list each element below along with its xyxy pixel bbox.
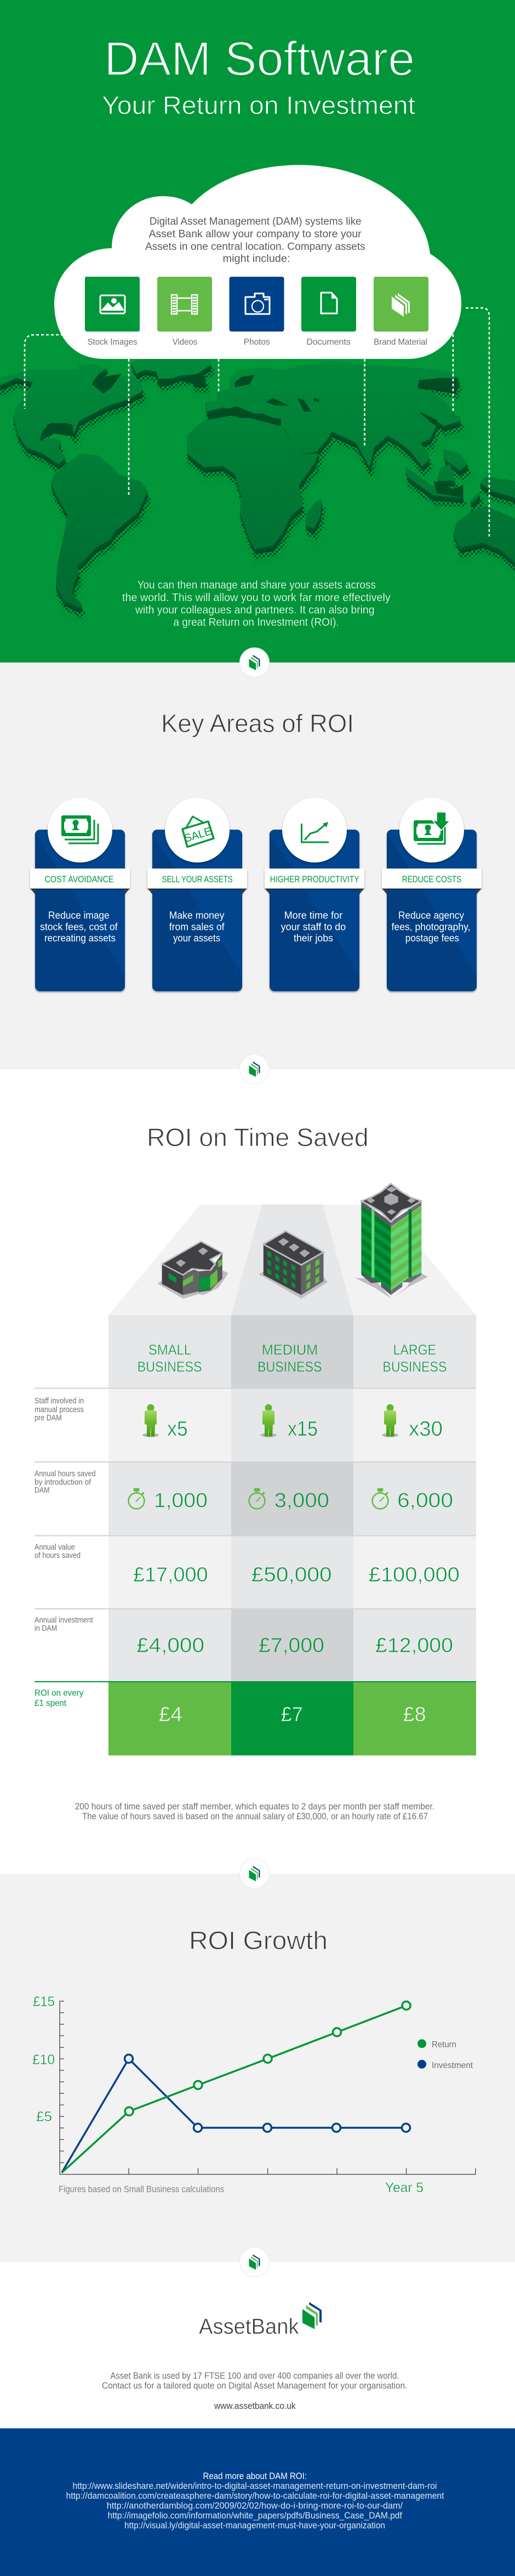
panel: cost avoidance card: recreating assets — [44, 932, 116, 944]
panel: cost avoidance card: stock fees, cost of — [40, 921, 118, 933]
table row: annual hours saved: 3,000 — [274, 1489, 329, 1511]
icon: photos tile — [229, 277, 284, 332]
table row: staff involved — [35, 1388, 476, 1462]
table row: annual hours saved: DAM — [35, 1486, 49, 1495]
icon: medium building — [259, 1231, 328, 1299]
table: business size columns: BUSINESS — [138, 1358, 202, 1375]
footnote — [75, 1801, 434, 1821]
axis labels: £15 — [33, 1994, 55, 2009]
heading: ROI growth: ROI Growth — [189, 1926, 328, 1955]
chart axes — [60, 2001, 476, 2174]
table row: ROI on every pound spent: ROI on every — [35, 1689, 83, 1698]
table row: annual investment — [35, 1609, 476, 1682]
tile labels: Documents — [306, 338, 351, 347]
further reading: http://visual.ly/digital-asset-management-must-have-your-organization — [124, 2521, 385, 2531]
table row: ROI on every pound spent: £8 — [403, 1703, 426, 1726]
intro paragraph below the map — [122, 579, 391, 629]
panel: higher productivity card: your staff to do — [281, 921, 346, 933]
panel: blue footer — [0, 2429, 515, 2576]
table row: annual investment: £12,000 — [375, 1634, 453, 1657]
panel: green hero background — [0, 0, 515, 662]
table row: ROI on every pound spent: £4 — [159, 1703, 182, 1726]
axis labels: £5 — [36, 2109, 52, 2124]
panel: higher productivity card — [265, 798, 364, 991]
table row: staff involved: x30 — [409, 1418, 443, 1441]
section badge — [240, 648, 270, 677]
chart legend — [417, 2040, 473, 2070]
table: perspective top — [108, 1204, 476, 1315]
table row: staff involved: x5 — [167, 1418, 188, 1441]
icon: sale sign: SALE — [183, 825, 213, 845]
icon: sale sign — [182, 816, 214, 847]
icon: small building — [158, 1242, 228, 1299]
table: business size columns: BUSINESS — [258, 1358, 322, 1375]
website: www.assetbank.co.uk — [214, 2401, 296, 2411]
table row: ROI on every pound spent — [35, 1682, 476, 1756]
panel: higher productivity card: More time for — [284, 910, 342, 921]
section badge — [240, 2247, 270, 2277]
further reading — [66, 2471, 444, 2531]
panel: reduce costs card: REDUCE COSTS — [402, 874, 461, 884]
further reading: http://www.slideshare.net/widen/intro-to-digital-asset-management-return-on-investment-dam-roi — [72, 2481, 437, 2491]
table row: annual investment: in DAM — [35, 1624, 57, 1633]
table: business size columns: LARGE — [393, 1341, 436, 1358]
cloud text: Assets in one central location. Company assets — [145, 241, 365, 253]
section badge — [240, 1859, 270, 1888]
icon: brand material tile — [374, 277, 428, 332]
cloud text: might include: — [222, 253, 290, 265]
table: business size columns: SMALL — [148, 1341, 191, 1358]
world map — [0, 359, 515, 621]
panel: reduce costs card — [382, 798, 482, 991]
table row: ROI on every pound spent: £1 spent — [35, 1699, 67, 1708]
footnote: 200 hours of time saved per staff member, which equates to 2 days per month per staff member. — [75, 1801, 434, 1812]
logo: Asset Bank — [199, 2302, 322, 2339]
heading: key areas of ROI: Key Areas of ROI — [161, 709, 354, 738]
table row: staff involved: x15 — [288, 1418, 318, 1441]
subtitle: Your Return on Investment — [102, 91, 415, 119]
panel: higher productivity card: their jobs — [294, 932, 333, 944]
icon: large building — [356, 1184, 428, 1299]
panel: sell your assets card: Make money — [169, 910, 225, 921]
table row: annual value of hours saved: £50,000 — [251, 1563, 332, 1586]
chart legend: Investment — [432, 2061, 473, 2070]
company text — [102, 2371, 407, 2391]
panel: cost avoidance card — [30, 798, 130, 991]
panel: higher productivity card: HIGHER PRODUCTIVITY — [270, 874, 359, 884]
icon: stock images tile — [85, 277, 140, 332]
tile labels: Brand Material — [374, 338, 427, 347]
icon: money stack — [61, 815, 98, 843]
company text: Contact us for a tailored quote on Digital Asset Management for your organisation. — [102, 2380, 407, 2391]
line chart — [32, 1994, 476, 2195]
table row: annual hours saved: by introduction of — [35, 1478, 91, 1487]
cloud text — [145, 216, 365, 265]
panel: cost avoidance card: Reduce image — [48, 910, 110, 921]
title: DAM Software — [104, 32, 415, 85]
axis labels: Year 5 — [385, 2180, 424, 2195]
intro paragraph below the map: You can then manage and share your assets across — [138, 579, 376, 591]
panel: cloud — [54, 165, 461, 359]
table row: annual value of hours saved: £17,000 — [133, 1563, 208, 1586]
table row: annual investment: Annual investment — [35, 1616, 93, 1625]
heading: ROI on time saved: ROI on Time Saved — [147, 1123, 369, 1152]
panel: sell your assets card — [147, 798, 247, 991]
table: business size columns: MEDIUM — [262, 1341, 318, 1358]
tile labels: Photos — [244, 338, 270, 347]
intro paragraph below the map: with your colleagues and partners. It can also bring — [135, 604, 375, 616]
table row: annual value of hours saved: £100,000 — [369, 1563, 460, 1586]
table row: annual investment: £7,000 — [259, 1634, 324, 1657]
panel: ROI on time saved background — [0, 1069, 515, 1874]
panel: reduce costs card: postage fees — [405, 932, 459, 944]
table row: annual hours saved: 6,000 — [397, 1489, 453, 1511]
table row: annual investment: £4,000 — [136, 1634, 204, 1657]
further reading: Read more about DAM ROI: — [203, 2471, 307, 2481]
panel: reduce costs card: Reduce agency — [398, 910, 465, 921]
icon: documents tile — [301, 277, 356, 332]
icon: money with down arrow — [414, 812, 450, 844]
table row: staff involved: manual process — [35, 1406, 84, 1414]
table row: ROI on every pound spent: £7 — [281, 1703, 303, 1726]
table: business size columns: BUSINESS — [382, 1358, 447, 1375]
intro paragraph below the map: the world. This will allow you to work far more effectively — [122, 592, 391, 604]
axis labels: £10 — [32, 2052, 55, 2067]
table row: annual value of hours saved: Annual value — [35, 1543, 75, 1552]
intro paragraph below the map: a great Return on Investment (ROI). — [173, 616, 339, 629]
company text: Asset Bank is used by 17 FTSE 100 and over 400 companies all over the world. — [110, 2371, 399, 2381]
icon: growth chart — [301, 822, 329, 842]
tile labels — [88, 338, 427, 347]
panel: key areas background — [0, 662, 515, 1069]
section badge — [240, 1054, 270, 1084]
table row: annual value of hours saved: of hours saved — [35, 1551, 81, 1560]
series: return — [62, 2001, 410, 2173]
logo: Asset Bank: AssetBank — [199, 2315, 300, 2339]
table row: annual hours saved — [35, 1462, 476, 1535]
panel: sell your assets card: your assets — [173, 932, 220, 944]
footnote: The value of hours saved is based on the annual salary of £30,000, or an hourly rate of £16.67 — [82, 1811, 428, 1821]
table row: annual hours saved: Annual hours saved — [35, 1470, 95, 1478]
panel: reduce costs card: fees, photography, — [392, 921, 470, 933]
tile labels: Stock Images — [88, 338, 137, 347]
panel: ROI growth background — [0, 1874, 515, 2262]
chart note: Figures based on Small Business calculations — [59, 2184, 224, 2194]
series: investment — [62, 2055, 410, 2173]
table: business size columns — [108, 1315, 476, 1388]
panel: sell your assets card: SELL YOUR ASSETS — [162, 874, 233, 884]
panel: cost avoidance card: COST AVOIDANCE — [45, 874, 114, 884]
chart legend: Return — [432, 2040, 456, 2049]
table row: annual value of hours saved — [35, 1535, 476, 1609]
tile labels: Videos — [173, 338, 197, 347]
axis labels — [32, 1994, 424, 2195]
table row: staff involved: pre DAM — [35, 1414, 62, 1423]
further reading: http://damcoalition.com/createasphere-dam/story/how-to-calculate-roi-for-digital-asset-management — [66, 2491, 444, 2501]
cloud text: Asset Bank allow your company to store your — [149, 229, 362, 240]
panel: sell your assets card: from sales of — [169, 921, 225, 933]
icon: videos tile — [157, 277, 212, 332]
dotted connector lines — [25, 308, 489, 536]
panel: footer white background — [0, 2262, 515, 2429]
table row: staff involved: Staff involved in — [35, 1397, 84, 1406]
table row: annual hours saved: 1,000 — [154, 1489, 208, 1511]
further reading: http://imagefolio.com/information/white_papers/pdfs/Business_Case_DAM.pdf — [108, 2511, 402, 2521]
cloud text: Digital Asset Management (DAM) systems like — [150, 216, 362, 227]
further reading: http://anotherdamblog.com/2009/02/02/how-do-i-bring-more-roi-to-our-dam/ — [107, 2501, 403, 2511]
